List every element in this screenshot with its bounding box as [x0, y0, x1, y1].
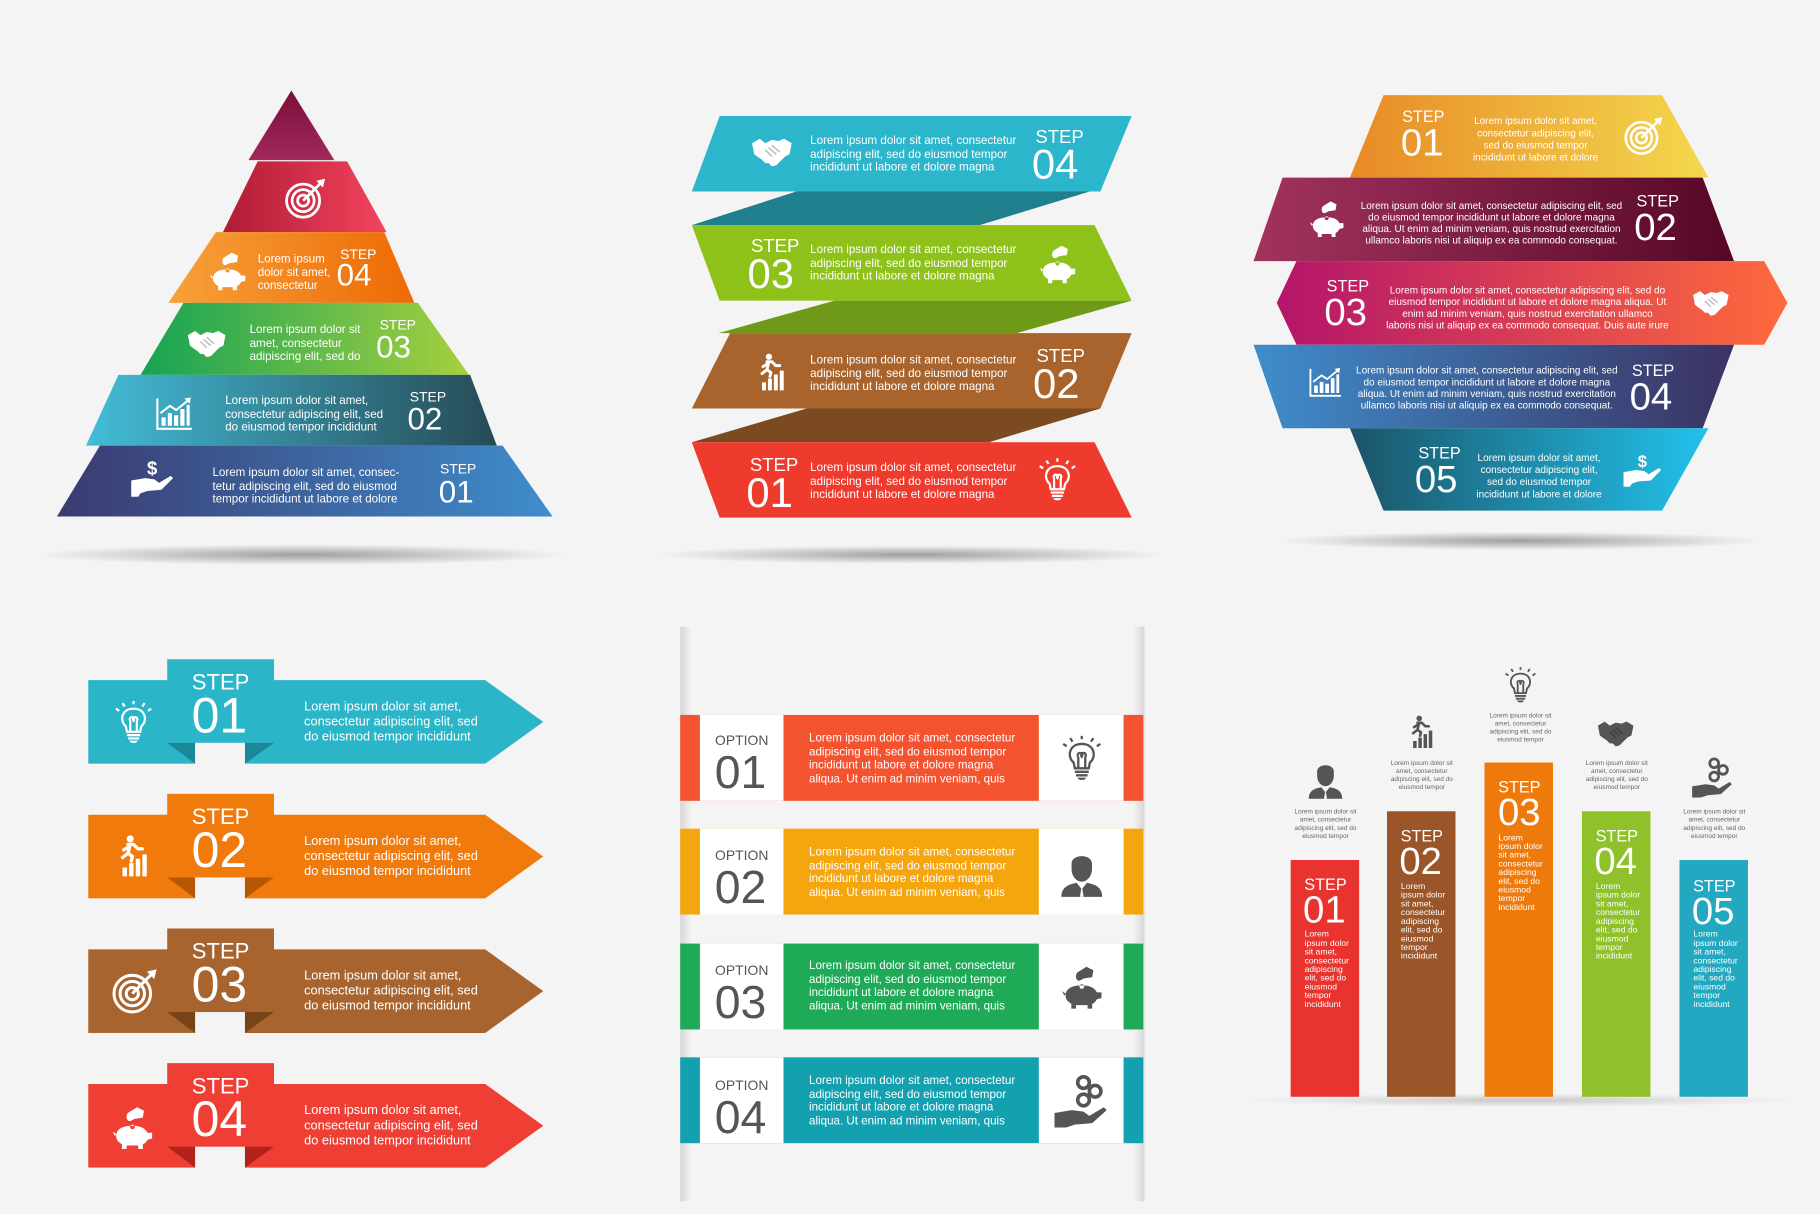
- option 02: 02: [715, 861, 766, 913]
- ribbon: step 03: Lorem ipsum dolor sit amet, consectetur: [810, 243, 1017, 256]
- ribbon: step 01: STEP: [750, 454, 798, 475]
- arrow: step 04: do eiusmod tempor incididunt: [304, 1132, 471, 1147]
- hex band: step 05: [1350, 428, 1709, 511]
- tier: step 01: tempor incididunt ut labore et dolore: [212, 493, 397, 506]
- arrow: step 04: STEP: [192, 1073, 249, 1098]
- bar: step 05: consectetur: [1693, 955, 1738, 965]
- option 03: [680, 944, 1143, 1029]
- bar: step 05: [1679, 759, 1748, 1097]
- bar: step 02: Lorem ipsum dolor sit: [1391, 760, 1453, 767]
- arrow: step 01: STEP: [192, 669, 249, 694]
- tier: step 03: [141, 303, 469, 375]
- bar: step 04: Lorem ipsum dolor sit: [1586, 760, 1648, 767]
- option 02: OPTION: [715, 847, 768, 863]
- option 04: adipiscing elit, sed do eiusmod tempor: [809, 1088, 1006, 1101]
- ribbon: step 01: 01: [746, 469, 793, 516]
- hex band: step 01: consectetur adipiscing elit,: [1477, 128, 1594, 139]
- bar: step 04: ipsum dolor: [1596, 890, 1640, 900]
- bar: step 03: Lorem ipsum dolor sit: [1489, 712, 1552, 719]
- arrow: step 02: [88, 794, 543, 898]
- arrow: step 04: 04: [192, 1091, 247, 1147]
- bar: step 01: Lorem ipsum dolor sit: [1294, 809, 1357, 816]
- bar: step 01: elit, sed do: [1305, 973, 1346, 983]
- bar: step 02: eiusmod: [1401, 933, 1434, 943]
- option 04: incididunt ut labore et dolore magna: [809, 1101, 994, 1114]
- tier: target: [223, 161, 387, 232]
- tier: step 01: [57, 446, 553, 516]
- bar: step 02: amet, consectetur: [1396, 768, 1448, 775]
- bar: step 03: STEP: [1498, 779, 1541, 797]
- tier: step 03: Lorem ipsum dolor sit: [250, 323, 361, 336]
- hex band: step 02: ullamco laboris nisi ut aliquip ex ea commodo consequat.: [1365, 236, 1618, 247]
- bar: step 04: tempor: [1596, 942, 1623, 952]
- panel: zigzag ribbon: [656, 116, 1166, 564]
- bar: step 03: eiusmod: [1498, 885, 1531, 895]
- bar: step 03: Lorem: [1498, 832, 1523, 842]
- arrow: step 04: consectetur adipiscing elit, sed: [304, 1117, 478, 1132]
- bar: step 05: 05: [1692, 890, 1734, 933]
- hex band: step 02: do eiusmod tempor incididunt ut labore et dolore magna: [1368, 213, 1615, 224]
- ribbon: step 01: incididunt ut labore et dolore magna: [810, 488, 995, 501]
- tier: step 02: [86, 375, 497, 446]
- bar: step 04: incididunt: [1596, 951, 1633, 961]
- tier: step 03: adipiscing elit, sed do: [250, 350, 360, 363]
- bar: step 01: tempor: [1305, 990, 1331, 1000]
- bar: step 04: eiusmod tempor: [1594, 784, 1641, 791]
- arrow: step 01: Lorem ipsum dolor sit amet,: [304, 698, 461, 713]
- hex band: step 03: 03: [1324, 291, 1367, 334]
- bar: step 05: sit amet,: [1693, 947, 1726, 957]
- bar: step 05: tempor: [1693, 990, 1720, 1000]
- tier: step 02: Lorem ipsum dolor sit amet,: [225, 394, 368, 407]
- option 01: [680, 715, 1143, 801]
- option 01: adipiscing elit, sed do eiusmod tempor: [809, 746, 1006, 759]
- tier: step 01: Lorem ipsum dolor sit amet, consec-: [212, 466, 399, 479]
- bar: step 01: consectetur: [1305, 955, 1349, 965]
- option 03: 03: [715, 976, 766, 1028]
- bar: step 01: Lorem: [1305, 929, 1329, 939]
- tier: step 02: 02: [407, 401, 442, 436]
- bar: step 03: incididunt: [1498, 902, 1535, 912]
- bar: step 05: Lorem ipsum dolor sit: [1683, 809, 1745, 816]
- hex band: step 04: [1254, 345, 1734, 428]
- bar: step 04: 04: [1594, 840, 1637, 883]
- tier: step 03: STEP: [380, 317, 416, 333]
- bar: step 02: Lorem: [1401, 881, 1425, 891]
- bar: step 02: STEP: [1401, 827, 1443, 845]
- hex band: step 03: STEP: [1327, 277, 1369, 295]
- bar: step 01: [1291, 765, 1359, 1097]
- tier: step 02: consectetur adipiscing elit, sed: [225, 408, 383, 421]
- bar: step 04: sit amet,: [1596, 898, 1628, 908]
- fold 1: [692, 190, 1093, 225]
- ribbon: step 02: Lorem ipsum dolor sit amet, consectetur: [810, 353, 1017, 366]
- option 04: Lorem ipsum dolor sit amet, consectetur: [809, 1074, 1015, 1087]
- tier: step 01: 01: [439, 475, 474, 510]
- arrow: step 02: consectetur adipiscing elit, sed: [304, 848, 478, 863]
- hex band: step 04: ullamco laboris nisi ut aliquip ex ea commodo consequat.: [1361, 401, 1613, 412]
- bar: step 04: amet, consectetur: [1591, 768, 1643, 775]
- arrow: step 03: Lorem ipsum dolor sit amet,: [304, 968, 461, 983]
- bar: step 03: adipiscing elit, sed do: [1489, 729, 1552, 736]
- panel: options: [680, 627, 1144, 1201]
- hex band: step 05: 05: [1415, 458, 1457, 501]
- ribbon: step 01: [692, 442, 1132, 518]
- bar: step 01: sit amet,: [1305, 947, 1337, 957]
- panel: bar steps: [1242, 667, 1799, 1107]
- bar: step 01: incididunt: [1305, 999, 1341, 1009]
- bar: step 05: elit, sed do: [1693, 973, 1735, 983]
- option 03: adipiscing elit, sed do eiusmod tempor: [809, 973, 1006, 986]
- bar: step 01: adipiscing: [1305, 964, 1343, 974]
- bar: step 04: [1582, 722, 1650, 1097]
- hex band: step 05: Lorem ipsum dolor sit amet,: [1478, 453, 1601, 464]
- tier: step 04: dolor sit amet,: [258, 266, 331, 279]
- arrow: step 04: [88, 1063, 543, 1168]
- hex band: step 03: [1277, 261, 1787, 345]
- bar: step 05: ipsum dolor: [1693, 938, 1738, 948]
- hex band: step 05: consectetur adipiscing elit,: [1481, 465, 1598, 476]
- ribbon: step 04: [692, 116, 1132, 192]
- bar: step 01: STEP: [1304, 876, 1347, 894]
- ribbon: step 02: STEP: [1037, 345, 1085, 366]
- hex band: step 01: [1350, 95, 1709, 178]
- bar: step 03: sit amet,: [1498, 850, 1531, 860]
- bar: step 03: 03: [1498, 791, 1541, 834]
- hex band: step 03: eiusmod tempor incididunt ut labore et dolore magna aliqua. Ut: [1389, 297, 1666, 308]
- ribbon: step 03: [692, 225, 1132, 301]
- ribbon: step 01: adipiscing elit, sed do eiusmod tempor: [810, 475, 1008, 488]
- ribbon: step 02: adipiscing elit, sed do eiusmod tempor: [810, 367, 1008, 380]
- bar: step 01: eiusmod tempor: [1302, 833, 1350, 840]
- hex band: step 02: Lorem ipsum dolor sit amet, consectetur adipiscing elit, sed: [1361, 201, 1622, 212]
- bar: step 04: adipiscing elit, sed do: [1586, 776, 1648, 783]
- arrow: step 02: Lorem ipsum dolor sit amet,: [304, 833, 461, 848]
- ribbon: step 03: 03: [748, 250, 794, 297]
- bar: step 02: sit amet,: [1401, 898, 1433, 908]
- bar: step 03: elit, sed do: [1498, 876, 1540, 886]
- bar: step 05: Lorem: [1693, 929, 1718, 939]
- arrow: step 03: STEP: [192, 939, 249, 964]
- bar: step 05: amet, consectetur: [1689, 817, 1741, 824]
- ribbon: step 04: Lorem ipsum dolor sit amet, consectetur: [810, 134, 1017, 147]
- bar: step 01: amet, consectetur: [1300, 817, 1352, 824]
- fold 2: [718, 301, 1132, 333]
- bar: step 05: adipiscing elit, sed do: [1683, 825, 1746, 832]
- bar: step 02: adipiscing elit, sed do: [1391, 776, 1453, 783]
- tier: step 04: [168, 232, 414, 303]
- tier: step 02: STEP: [410, 389, 446, 405]
- bar: step 05: eiusmod: [1693, 981, 1726, 991]
- bar: step 02: elit, sed do: [1401, 925, 1443, 935]
- arrow: step 02: do eiusmod tempor incididunt: [304, 863, 471, 878]
- option 01: incididunt ut labore et dolore magna: [809, 758, 994, 771]
- tier: step 04: Lorem ipsum: [258, 252, 325, 265]
- tier: step 04: STEP: [340, 246, 376, 262]
- hex band: step 05: incididunt ut labore et dolore: [1476, 489, 1602, 500]
- hex band: step 01: STEP: [1402, 108, 1445, 126]
- bar: step 02: tempor: [1401, 942, 1428, 952]
- pyramid apex: [248, 91, 334, 160]
- bar: step 03: adipiscing: [1498, 867, 1537, 877]
- option 04: OPTION: [715, 1077, 768, 1093]
- panel: pyramid: [35, 91, 569, 565]
- tier: step 03: amet, consectetur: [250, 337, 342, 350]
- bar: step 03: consectetur: [1498, 858, 1543, 868]
- arrow: step 03: do eiusmod tempor incididunt: [304, 998, 471, 1013]
- arrow: step 01: consectetur adipiscing elit, sed: [304, 713, 478, 728]
- tier: step 04: 04: [337, 258, 372, 293]
- option 03: OPTION: [715, 962, 768, 978]
- bar: step 03: tempor: [1498, 893, 1525, 903]
- bar: step 02: eiusmod tempor: [1399, 784, 1446, 791]
- hex band: step 01: 01: [1401, 122, 1444, 165]
- bar: step 04: adipiscing: [1596, 916, 1634, 926]
- ribbon: step 02: incididunt ut labore et dolore magna: [810, 380, 995, 393]
- bar: step 02: 02: [1399, 840, 1442, 883]
- option 01: OPTION: [715, 732, 768, 748]
- ribbon: step 03: STEP: [751, 235, 799, 256]
- arrow: step 03: 03: [192, 957, 247, 1013]
- arrow: step 02: STEP: [192, 804, 249, 829]
- bar: step 03: eiusmod tempor: [1497, 737, 1545, 744]
- hex band: step 04: Lorem ipsum dolor sit amet, consectetur adipiscing elit, sed: [1356, 366, 1618, 377]
- hex band: step 04: 04: [1630, 376, 1672, 419]
- bar: step 02: adipiscing: [1401, 916, 1439, 926]
- ribbon: step 03: adipiscing elit, sed do eiusmod tempor: [810, 257, 1008, 270]
- bar: step 02: ipsum dolor: [1401, 890, 1445, 900]
- bar: step 03: [1485, 667, 1553, 1097]
- ribbon: step 02: 02: [1033, 360, 1079, 407]
- bar: step 01: eiusmod: [1305, 981, 1337, 991]
- bar: step 03: amet, consectetur: [1495, 720, 1547, 727]
- tier: step 01: STEP: [440, 461, 476, 477]
- hex band: step 03: Lorem ipsum dolor sit amet, consectetur adipiscing elit, sed do: [1390, 286, 1666, 297]
- option 03: incididunt ut labore et dolore magna: [809, 986, 994, 999]
- arrow: step 01: 01: [192, 687, 247, 743]
- hex band: step 02: 02: [1634, 206, 1677, 249]
- bar: step 02: consectetur: [1401, 907, 1445, 917]
- hex band: step 01: sed do eiusmod tempor: [1483, 141, 1588, 152]
- arrow: step 03: [88, 928, 543, 1033]
- option 01: aliqua. Ut enim ad minim veniam, quis: [809, 772, 1005, 785]
- bar: step 01: adipiscing elit, sed do: [1294, 825, 1357, 832]
- option 02: incididunt ut labore et dolore magna: [809, 872, 994, 885]
- tier: step 02: do eiusmod tempor incididunt: [225, 421, 377, 434]
- bar: step 01: 01: [1303, 889, 1346, 932]
- bar: step 02: incididunt: [1401, 951, 1438, 961]
- hex band: step 03: enim ad minim veniam, quis nostrud exercitation ullamco: [1402, 309, 1653, 320]
- bar: step 05: incididunt: [1693, 999, 1730, 1009]
- ribbon: step 02: [692, 333, 1132, 409]
- ribbon: step 04: incididunt ut labore et dolore magna: [810, 161, 995, 174]
- bar: step 03: ipsum dolor: [1498, 841, 1543, 851]
- hex band: step 01: Lorem ipsum dolor sit amet,: [1474, 116, 1597, 127]
- arrow: step 01: [88, 659, 543, 764]
- bar: step 04: elit, sed do: [1596, 925, 1638, 935]
- bar: step 05: adipiscing: [1693, 964, 1732, 974]
- hex band: step 02: aliqua. Ut enim ad minim veniam, quis nostrud exercitation: [1362, 224, 1621, 235]
- hex band: step 01: incididunt ut labore et dolore: [1473, 153, 1599, 164]
- option 02: adipiscing elit, sed do eiusmod tempor: [809, 859, 1006, 872]
- tier: step 04: consectetur: [258, 279, 318, 292]
- arrow: step 04: Lorem ipsum dolor sit amet,: [304, 1102, 461, 1117]
- option 01: 01: [715, 746, 766, 798]
- tier: step 03: 03: [376, 329, 411, 364]
- option 01: Lorem ipsum dolor sit amet, consectetur: [809, 732, 1015, 745]
- hex band: step 02: STEP: [1637, 193, 1679, 211]
- ribbon: step 04: adipiscing elit, sed do eiusmod tempor: [810, 148, 1008, 161]
- ribbon: step 03: incididunt ut labore et dolore magna: [810, 270, 995, 283]
- bar: step 04: eiusmod: [1596, 933, 1629, 943]
- option 02: Lorem ipsum dolor sit amet, consectetur: [809, 845, 1015, 858]
- option 03: Lorem ipsum dolor sit amet, consectetur: [809, 959, 1015, 972]
- hex band: step 04: STEP: [1632, 362, 1674, 380]
- bar: step 01: ipsum dolor: [1305, 938, 1349, 948]
- option 02: aliqua. Ut enim ad minim veniam, quis: [809, 886, 1005, 899]
- tier: step 01: tetur adipiscing elit, sed do eiusmod: [212, 480, 397, 493]
- bar: step 04: STEP: [1596, 827, 1638, 845]
- option 04: aliqua. Ut enim ad minim veniam, quis: [809, 1115, 1005, 1128]
- bar: step 02: [1387, 716, 1455, 1097]
- ribbon: step 04: STEP: [1035, 126, 1084, 147]
- option 04: [680, 1057, 1143, 1143]
- option 04: 04: [715, 1091, 766, 1143]
- ribbon: step 04: 04: [1032, 141, 1078, 188]
- panel: hexagon: [1254, 95, 1787, 550]
- bar: step 04: consectetur: [1596, 907, 1640, 917]
- bar: step 05: STEP: [1693, 877, 1736, 895]
- hex band: step 04: do eiusmod tempor incididunt ut labore et dolore magna: [1364, 377, 1611, 388]
- arrow: step 02: 02: [192, 822, 247, 878]
- ribbon: step 01: Lorem ipsum dolor sit amet, consectetur: [810, 461, 1017, 474]
- bar: step 05: eiusmod tempor: [1691, 833, 1738, 840]
- hex band: step 05: sed do eiusmod tempor: [1487, 477, 1592, 488]
- option 02: [680, 829, 1143, 915]
- arrow: step 01: do eiusmod tempor incididunt: [304, 728, 471, 743]
- hex band: step 05: STEP: [1418, 444, 1461, 462]
- hex band: step 02: [1254, 178, 1734, 261]
- arrow: step 03: consectetur adipiscing elit, sed: [304, 983, 478, 998]
- panel: arrow steps: [88, 659, 543, 1168]
- hex band: step 03: laboris nisi ut aliquip ex ea commodo consequat. Duis aute irure: [1386, 320, 1669, 331]
- fold 3: [692, 409, 1100, 442]
- hex band: step 04: aliqua. Ut enim ad minim veniam, quis nostrud exercitation: [1358, 389, 1616, 400]
- option 03: aliqua. Ut enim ad minim veniam, quis: [809, 1000, 1005, 1013]
- bar: step 04: Lorem: [1596, 881, 1620, 891]
